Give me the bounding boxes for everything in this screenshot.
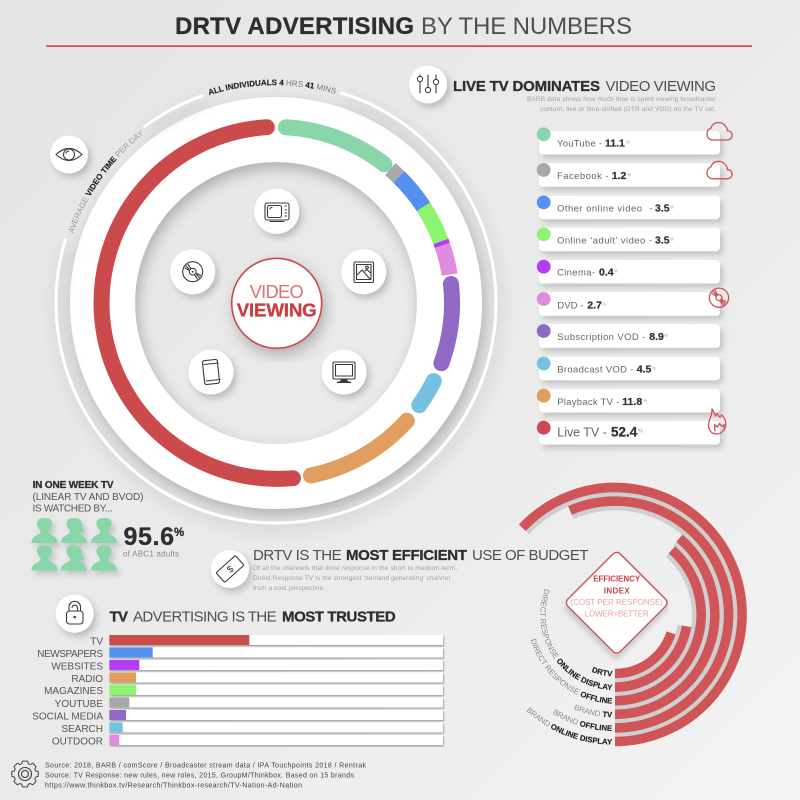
description (527, 96, 717, 113)
stat: 95.6 percent (123, 523, 184, 559)
bar: radio: RADIO (71, 674, 103, 685)
legend: facebook (537, 163, 631, 182)
legend: subscription vod: 8.9 (649, 331, 664, 343)
panel: most efficient (211, 547, 588, 592)
legend: youtube: % (626, 140, 630, 145)
center badge: video viewing (232, 258, 322, 348)
legend: broadcast vod: Broadcast VOD - (557, 364, 633, 375)
legend: other online video: - (649, 204, 652, 215)
text: in one week tv: (LINEAR TV AND BVOD) (32, 492, 144, 503)
stat: 95.6 percent: % (174, 527, 184, 539)
legend: online adult video: Online ‘adult’ video - (557, 235, 652, 246)
legend: subscription vod: % (664, 333, 668, 338)
heading: DRTV IS THE (253, 547, 342, 564)
legend: dvd: % (602, 301, 606, 306)
sources: Source: 2018, BARB / comScore / Broadcaster stream data / IPA Touchpoints 2018 / Rentrak (45, 762, 366, 769)
bar: social media (32, 710, 126, 722)
legend: playback tv: 11.8 (622, 396, 642, 408)
legend: dvd: DVD - (557, 300, 583, 311)
bar: newspapers: NEWSPAPERS (37, 649, 103, 660)
description: content, live or time-shifted (DTR and VOD) on the TV set. (540, 106, 716, 113)
title (46, 13, 752, 47)
bar: tv: TV (90, 636, 103, 647)
icon: disc dvd (709, 288, 729, 307)
donut segments (102, 127, 452, 479)
text: in one week tv (32, 480, 144, 515)
icon: padlock (56, 595, 94, 633)
description: from a cost perspective. (253, 585, 325, 592)
icon: picture (341, 249, 386, 294)
bar: tv (90, 635, 249, 647)
legend: cinema: Cinema- (557, 268, 595, 279)
arc labels: BRAND OFFLINE (553, 709, 612, 731)
legend: live tv: Live TV - (557, 426, 607, 440)
heading: MOST EFFICIENT (346, 547, 467, 564)
title: BY THE NUMBERS (421, 13, 632, 40)
icon: banknote: $ (225, 563, 237, 576)
icon: gear (12, 761, 38, 787)
icon: flame (708, 409, 726, 434)
legend: playback tv: % (643, 398, 647, 403)
description (253, 565, 457, 592)
legend: facebook: 1.2 (612, 170, 626, 182)
legend: playback tv: Playback TV - (557, 397, 619, 408)
bar: search (61, 722, 123, 735)
icon: monitor (322, 350, 366, 394)
arc labels: DIRECT RESPONSE ONLINE DISPLAY (540, 589, 612, 690)
bar: websites (51, 660, 139, 672)
bar: radio (71, 672, 136, 685)
bar tracks (109, 635, 443, 745)
heading: VIDEO VIEWING (606, 78, 716, 95)
legend: dvd (537, 292, 606, 311)
text: in one week tv: IN ONE WEEK TV (32, 480, 114, 491)
bar: newspapers (37, 647, 153, 660)
legend: subscription vod: Subscription VOD - (557, 332, 645, 343)
arc label: average video time: AVERAGE VIDEO TIME PER DAY (69, 130, 142, 234)
heading (253, 547, 588, 564)
legend: dvd: 2.7 (587, 299, 602, 311)
diamond: efficiency index: (COST PER RESPONSE) (570, 598, 663, 607)
arc shadows (527, 494, 735, 735)
arc label: all individuals: ALL INDIVIDUALS 4 HRS 41 MINS (209, 80, 336, 96)
bar: magazines (44, 685, 136, 697)
diamond: efficiency index: EFFICIENCY (593, 575, 641, 584)
heading: MOST TRUSTED (282, 609, 396, 626)
legend: subscription vod (537, 324, 668, 343)
arc labels: DIRECT RESPONSE OFFLINE (530, 638, 612, 704)
heading: TV (110, 609, 128, 626)
arc labels: BRAND TV (574, 704, 612, 718)
bar: websites: WEBSITES (51, 661, 103, 672)
diamond: efficiency index: LOWER=BETTER (585, 610, 649, 619)
icon: television (254, 189, 299, 234)
icon: banknote (211, 550, 249, 588)
icon: cloud youtube (707, 122, 732, 140)
icon: sliders (409, 66, 447, 104)
heading: ADVERTISING IS THE (133, 609, 277, 626)
heading: USE OF BUDGET (472, 547, 588, 564)
sources (45, 762, 366, 789)
legend: youtube: 11.1 (605, 138, 625, 150)
legend: youtube: YouTube - (557, 139, 602, 150)
stat: 95.6 percent: 95.6 (124, 523, 174, 551)
icon: disc (170, 249, 215, 294)
legend: live tv: % (638, 429, 643, 435)
panel: one week tv (32, 480, 184, 570)
arc labels (526, 589, 613, 744)
heading (110, 609, 396, 626)
heading: LIVE TV DOMINATES (453, 78, 600, 95)
text: in one week tv: IS WATCHED BY... (32, 504, 112, 515)
people icons (32, 518, 117, 570)
legend cards (539, 131, 720, 444)
bar: outdoor (52, 735, 119, 747)
panel: efficiency index chart (518, 482, 747, 746)
legend: broadcast vod (537, 357, 656, 375)
panel: live tv dominates (409, 66, 732, 444)
legend: live tv (537, 421, 643, 440)
sources: https://www.thinkbox.tv/Research/Thinkbox-research/TV-Nation-Ad-Nation (45, 782, 302, 789)
legend: cinema: % (614, 269, 618, 274)
legend: other online video (537, 196, 674, 215)
bar: search: SEARCH (61, 724, 103, 735)
diamond: efficiency index (564, 550, 669, 655)
legend: other online video: % (670, 205, 674, 210)
panel: most trusted (32, 595, 443, 747)
legend: online adult video: 3.5 (655, 234, 670, 246)
arc labels: DRTV (592, 666, 613, 676)
heading (453, 78, 716, 95)
legend: live tv: 52.4 (611, 425, 638, 440)
icon: eye (50, 136, 88, 174)
legend: broadcast vod: 4.5 (637, 363, 651, 375)
legend: other online video: 3.5 (655, 203, 670, 215)
legend: online adult video: % (670, 236, 674, 241)
diamond: efficiency index: INDEX (604, 586, 630, 595)
bar: youtube: YOUTUBE (55, 699, 103, 710)
legend: broadcast vod: % (652, 365, 656, 370)
arcs (522, 488, 742, 742)
bar: youtube (55, 697, 129, 710)
bar: outdoor: OUTDOOR (52, 736, 103, 747)
sources: Source: TV Response: new rules, new roles, 2015, GroupM/Thinkbox. Based on 15 brands (45, 772, 354, 779)
panel: video viewing donut (50, 80, 503, 533)
white ring (102, 130, 450, 476)
legend: cinema: 0.4 (599, 267, 614, 279)
bar: social media: SOCIAL MEDIA (32, 711, 103, 722)
legend: other online video: Other online video (557, 204, 642, 215)
legend: cinema (537, 260, 618, 279)
legend: online adult video (537, 227, 674, 246)
description: Of all the channels that drive response in the short to medium-term, (253, 565, 457, 572)
legend: playback tv (537, 389, 647, 408)
center badge: video viewing: VIEWING (237, 300, 317, 321)
description: BARB data shows how much time is spent viewing broadcaster (527, 96, 717, 103)
outer thin arc (56, 93, 496, 523)
stat: 95.6 percent: of ABC1 adults (123, 550, 179, 559)
icon: cloud facebook (707, 161, 732, 179)
legend: facebook: Facebook - (557, 171, 608, 182)
description: Direct Response TV is the strongest ‘demand generating’ channel (253, 575, 451, 582)
legend: facebook: % (627, 172, 631, 177)
icon: tablet (188, 350, 234, 394)
legend: youtube (537, 127, 630, 150)
title: DRTV ADVERTISING (175, 13, 414, 40)
bar: magazines: MAGAZINES (44, 686, 103, 697)
center badge: video viewing: VIDEO (250, 281, 304, 302)
arc labels: BRAND ONLINE DISPLAY (526, 707, 612, 744)
